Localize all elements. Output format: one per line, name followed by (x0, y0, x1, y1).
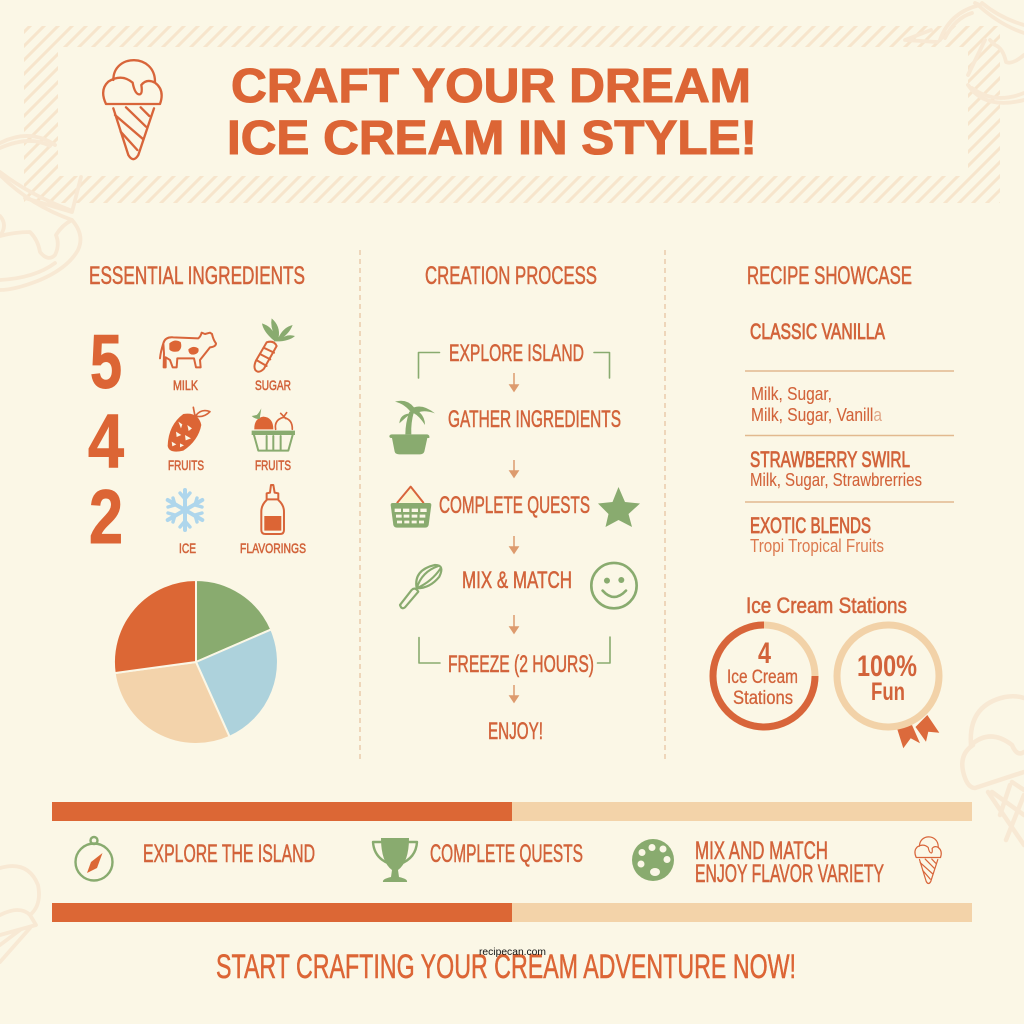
icon: palm plant (389, 401, 435, 454)
step: gather ingredients: GATHER INGREDIENTS (448, 406, 621, 433)
progress bars: bottom (52, 903, 972, 922)
ring: 4 stations: Ice Cream (727, 667, 798, 688)
number 2: 2 (89, 475, 123, 560)
icon: whisk (400, 565, 441, 608)
step: complete quests: COMPLETE QUESTS (439, 492, 590, 519)
icon: small ice cream cone (915, 837, 941, 883)
label: flavorings: FLAVORINGS (240, 540, 306, 556)
background: ghost ice cream bottom left (0, 866, 39, 962)
arrow (510, 615, 518, 633)
ring: 4 stations: 4 (758, 637, 771, 670)
icon: carrot (254, 318, 295, 372)
ingredients: vanilla: Milk, Sugar, (751, 384, 832, 404)
icon: star (598, 487, 640, 527)
rules (745, 371, 954, 502)
step: freeze: FREEZE (2 HOURS) (448, 651, 594, 678)
background: ghost ice cream top left (0, 136, 81, 290)
icon: flavoring bottle (261, 485, 284, 534)
recipe: classic vanilla: CLASSIC VANILLA (750, 319, 885, 344)
arrow (510, 685, 518, 702)
heading: recipe showcase: RECIPE SHOWCASE (747, 262, 912, 290)
icon: compass (76, 837, 112, 880)
text: enjoy flavor variety: ENJOY FLAVOR VARIETY (695, 860, 884, 888)
header (103, 60, 757, 165)
label: fruits (basket): FRUITS (255, 457, 291, 473)
label: fruits (strawberry): FRUITS (168, 457, 204, 473)
panel: creation process (389, 262, 640, 745)
title: ICE CREAM IN STYLE! (227, 112, 757, 165)
step: explore island: EXPLORE ISLAND (449, 340, 584, 367)
panel: recipe showcase (713, 262, 954, 748)
icon: snowflake (168, 490, 202, 530)
number 5: 5 (90, 320, 122, 405)
icon: cow (160, 333, 216, 367)
heading: essential ingredients: ESSENTIAL INGREDIENTS (89, 262, 305, 290)
panel: essential ingredients (88, 262, 306, 744)
ingredients: strawberry: Milk, Sugar, Strawbrerries (750, 470, 922, 490)
text: complete quests: COMPLETE QUESTS (430, 840, 583, 868)
icon: shopping basket (391, 487, 431, 528)
heading: ice cream stations: Ice Cream Stations (746, 593, 907, 618)
step: enjoy: ENJOY! (488, 718, 543, 745)
arrow (510, 373, 518, 391)
row: call to action items (76, 837, 941, 888)
ingredients: vanilla (751, 384, 883, 425)
ingredients: exotic: Tropi Tropical Fruits (750, 536, 884, 556)
icon: smiley (591, 563, 637, 608)
bracket: top (418, 352, 610, 378)
label: sugar: SUGAR (255, 377, 291, 393)
step: mix and match: MIX & MATCH (462, 567, 572, 594)
badge: 100% fun: 100% (857, 650, 917, 683)
recipe: exotic blends: EXOTIC BLENDS (750, 513, 871, 538)
background: ghost ice cream bottom right (962, 696, 1024, 845)
number 4: 4 (88, 399, 124, 484)
badge: 100% fun (837, 625, 939, 748)
progress bars: top (52, 802, 972, 821)
label: ice: ICE (179, 540, 196, 556)
text: mix and match: MIX AND MATCH (695, 837, 828, 865)
icon: ice cream cone (103, 60, 162, 159)
icon: fruit basket (252, 408, 295, 451)
arrow (510, 460, 518, 477)
text: explore the island: EXPLORE THE ISLAND (143, 840, 315, 868)
bracket: bottom (419, 637, 610, 663)
ring: 4 stations: Stations (733, 688, 793, 709)
dividers (360, 250, 665, 760)
icon: strawberry (168, 407, 210, 452)
banner: hatched title frame (24, 26, 1000, 203)
ring: 4 stations (713, 625, 815, 727)
background: ghost ice cream top right (905, 3, 1024, 103)
recipe: strawberry swirl: STRAWBERRY SWIRL (750, 447, 910, 472)
watermark: recipecan.com (479, 947, 546, 958)
heading: creation process: CREATION PROCESS (425, 262, 597, 290)
ingredients: vanilla: Milk, Sugar, Vanilla (751, 405, 883, 425)
icon: trophy (373, 838, 417, 882)
pie chart (114, 580, 278, 744)
title (227, 60, 757, 165)
title: CRAFT YOUR DREAM (231, 60, 751, 113)
label: milk: MILK (173, 377, 198, 393)
badge: 100% fun: Fun (871, 678, 905, 706)
icon: palette (632, 839, 674, 881)
arrow (510, 536, 518, 553)
